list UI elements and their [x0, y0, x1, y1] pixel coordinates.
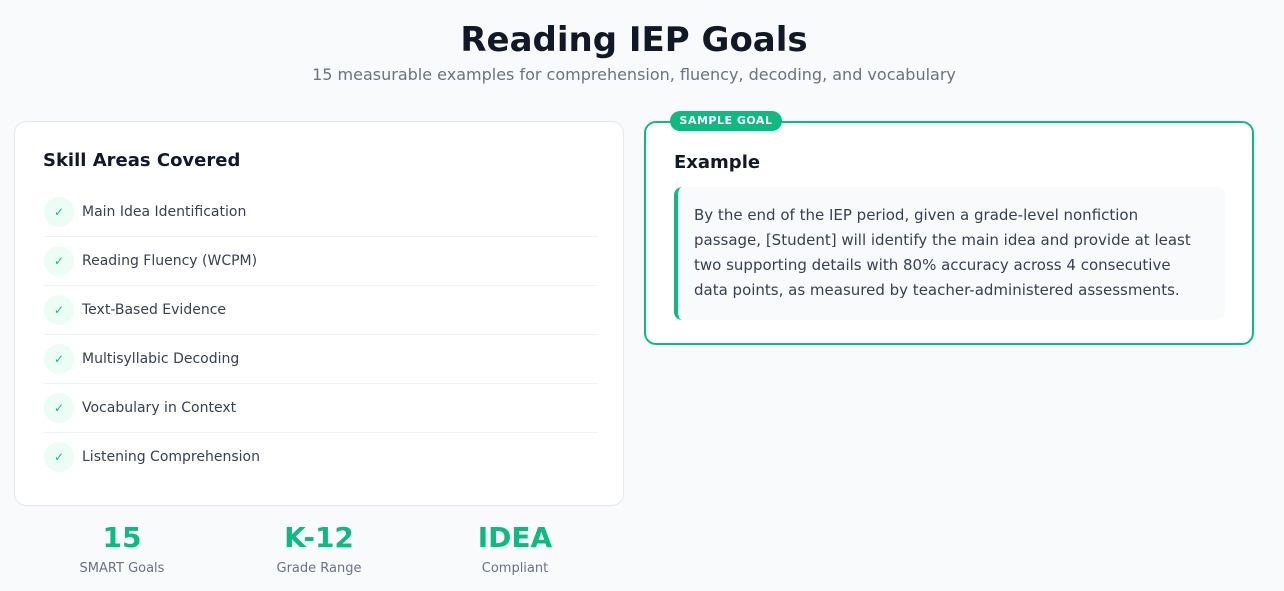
panel: sample goal	[644, 121, 1254, 345]
skill list	[44, 197, 598, 472]
item: fluency: Reading Fluency (WCPM)	[82, 253, 257, 269]
item: decoding: ✓	[54, 352, 64, 366]
stat: goals	[80, 521, 164, 576]
quote box: By the end of the IEP period, given a grade-level nonfiction passage, [Student] will identify the main idea and provide at least two supporting details with 80% accuracy across 4 consecutive data points, as measured by teacher-administered assessments.	[694, 206, 1191, 299]
item: evidence: Text-Based Evidence	[82, 302, 226, 318]
subtitle: 15 measurable examples for comprehension, fluency, decoding, and vocabulary	[312, 65, 956, 84]
heading: example: Example	[674, 152, 760, 173]
badge: sample goal	[670, 111, 782, 131]
item: listening: Listening Comprehension	[82, 449, 260, 465]
item: listening	[44, 442, 260, 472]
item: main idea: ✓	[54, 205, 64, 219]
panel: skill areas	[14, 121, 624, 506]
item: evidence	[44, 286, 598, 335]
item: vocabulary: Vocabulary in Context	[82, 400, 236, 416]
item: main idea	[44, 188, 598, 237]
item: main idea: Main Idea Identification	[82, 204, 246, 220]
heading: skill areas: Skill Areas Covered	[43, 150, 240, 171]
stat: IDEA	[478, 521, 552, 576]
stat: grade range: Grade Range	[276, 561, 361, 576]
badge: sample goal: SAMPLE GOAL	[680, 114, 772, 127]
quote box	[674, 187, 1225, 320]
item: decoding	[44, 335, 598, 384]
item: listening: ✓	[54, 450, 64, 464]
item: decoding: Multisyllabic Decoding	[82, 351, 239, 367]
item: fluency: ✓	[54, 254, 64, 268]
stat: IDEA: Compliant	[482, 561, 548, 576]
title: Reading IEP Goals	[460, 20, 808, 60]
item: fluency	[44, 237, 598, 286]
stat: goals: SMART Goals	[80, 561, 164, 576]
item: vocabulary: ✓	[54, 401, 64, 415]
stat: grade range: K-12	[284, 521, 354, 554]
stat: IDEA: IDEA	[478, 521, 552, 554]
item: evidence: ✓	[54, 303, 64, 317]
item: vocabulary	[44, 384, 598, 433]
stat: grade range	[276, 521, 361, 576]
stat: goals: 15	[103, 521, 141, 554]
